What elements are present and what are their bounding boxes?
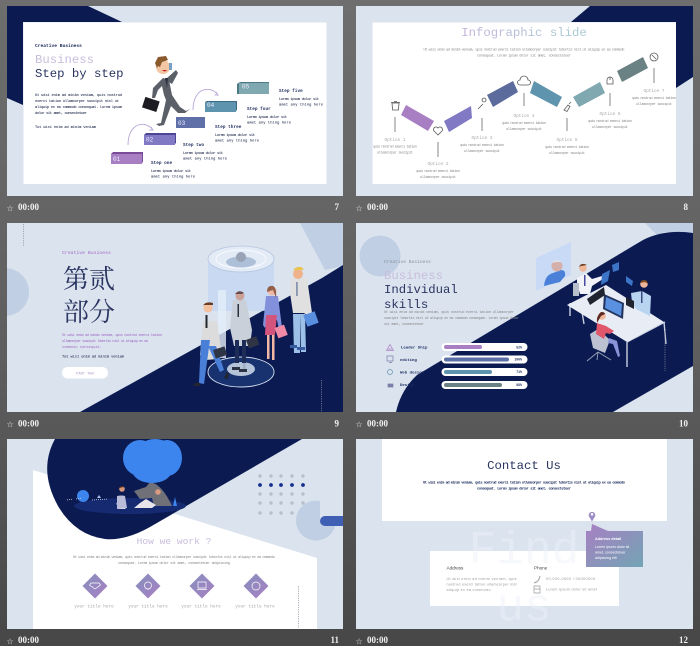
decorative slashes xyxy=(664,331,666,371)
footer bars with timings and slide numbers: 12 xyxy=(679,635,688,645)
footer bars with timings and slide numbers: ☆ xyxy=(356,204,363,213)
step descriptions: Lorem ipsum dolor sit xyxy=(279,97,319,102)
footer bars with timings and slide numbers: 00:00 xyxy=(18,418,39,428)
step descriptions: amet any thing here xyxy=(279,102,323,108)
lower white panel xyxy=(430,551,619,606)
option icons xyxy=(391,53,658,135)
step blocks 01 to 05: 03 xyxy=(178,120,186,127)
option descriptions: quis nostrud exerci tation xyxy=(545,145,589,150)
illustration: video window xyxy=(536,242,571,291)
decorative slashes xyxy=(24,224,322,411)
circle accent xyxy=(360,236,400,276)
left half circle xyxy=(7,268,29,316)
intro text: Ut wisi enim ad minim veniam, quis nostrud exerci tation ullamcorper suscipit lobortis nisl ut aliquip ex ea commodo xyxy=(424,48,624,52)
floating holograms xyxy=(601,262,633,286)
footer bars with timings and slide numbers: 00:00 xyxy=(367,635,388,645)
footer bars with timings and slide numbers: 10 xyxy=(679,418,688,428)
address callout: amet, consectetuer xyxy=(595,550,626,554)
skill percentages: 52% xyxy=(516,346,522,350)
diamond icons xyxy=(82,574,268,598)
intro text xyxy=(424,48,624,58)
phone column xyxy=(534,566,597,593)
option labels: Option 2 xyxy=(427,162,449,167)
illustration: businessman climbing steps xyxy=(142,56,190,126)
option descriptions: ullamcorper suscipit xyxy=(592,125,628,130)
heading: business step by step xyxy=(35,53,124,81)
address callout: Lorem ipsum dolor sit xyxy=(595,545,629,549)
chinese title: 第贰 xyxy=(63,265,115,294)
footer bars with timings and slide numbers: 8 xyxy=(684,202,688,212)
step labels: Step two xyxy=(183,143,204,148)
footer bars with timings and slide numbers xyxy=(6,202,688,646)
body text xyxy=(35,93,123,130)
address callout xyxy=(586,524,643,567)
option descriptions: quis nostrud exerci tation xyxy=(632,96,676,101)
body text xyxy=(73,556,275,565)
illustration: glass cylinder lab xyxy=(208,246,274,387)
white angled panel xyxy=(33,470,317,629)
footer bars with timings and slide numbers: 7 xyxy=(334,202,340,212)
white content panel xyxy=(372,22,676,184)
footer bars with timings and slide numbers: ☆ xyxy=(356,637,363,646)
option descriptions: ullamcorper suscipit xyxy=(549,151,585,156)
person: blond man in lab coat xyxy=(290,267,319,353)
body text: consequat. Lorem ipsum dolor sit amet, consectetuer adipiscing xyxy=(118,561,230,566)
option labels: Option 7 xyxy=(643,89,665,94)
chinese title: 部分 xyxy=(63,298,115,327)
step labels: Step four xyxy=(247,107,271,112)
footer bars with timings and slide numbers: 11 xyxy=(330,635,339,645)
skill bars xyxy=(442,343,528,389)
intro text: consequat. Lorem ipsum dolor sit amet, consectetuer xyxy=(477,54,571,58)
heading: Business xyxy=(384,269,443,283)
address column: Ut wisi enim ad minim veniam, quis xyxy=(446,577,517,581)
person: woman in pink skirt xyxy=(263,286,288,360)
option labels: Option 4 xyxy=(513,114,535,119)
step blocks 01 to 05: 01 xyxy=(113,156,121,163)
step descriptions: Lorem ipsum dolor sit xyxy=(183,151,223,156)
top white panel xyxy=(382,439,667,521)
curved arrows between steps xyxy=(128,89,218,145)
diamond captions xyxy=(74,604,274,608)
diamond captions: your title here xyxy=(128,604,168,610)
navy corner shape xyxy=(571,6,693,88)
body text: aliquip ex ea commodo consequat. Lorem ipsum xyxy=(35,105,123,110)
circle accent with blue pill xyxy=(296,501,343,541)
step descriptions: amet any thing here xyxy=(151,174,195,180)
skill labels: Design xyxy=(400,383,415,388)
footer bars with timings and slide numbers: ☆ xyxy=(6,204,14,213)
step blocks 01 to 05: 04 xyxy=(207,102,215,109)
step labels xyxy=(151,89,303,166)
option descriptions: quis nostrud exerci tation xyxy=(416,169,460,174)
big watermark: find us xyxy=(469,525,579,634)
body text: suscipit lobortis nisl ut aliquip ex ea commodo consequat. Lorem ipsum dolor xyxy=(384,316,519,321)
option descriptions: ullamcorper suscipit xyxy=(506,127,542,132)
footer bars with timings and slide numbers: ☆ xyxy=(356,420,363,429)
footer bars with timings and slide numbers: 9 xyxy=(334,418,340,428)
light blue corner xyxy=(645,223,693,235)
diamond captions: your title here xyxy=(235,604,275,610)
option descriptions xyxy=(373,96,676,180)
eyebrow: Creative Business xyxy=(384,259,431,265)
slide 12: contact us xyxy=(356,439,693,634)
option descriptions: quis nostrud exerci tation xyxy=(373,144,417,150)
purple body text xyxy=(62,333,162,350)
footer bars with timings and slide numbers: 00:00 xyxy=(18,202,39,212)
footer bars with timings and slide numbers: ☆ xyxy=(6,420,14,429)
slide 8: infographic zigzag xyxy=(356,6,693,196)
purple body text: Ut wisi enim ad minim veniam, quis nostrud exerci tation xyxy=(62,333,162,338)
button: part two xyxy=(62,367,108,378)
step descriptions: Lorem ipsum dolor sit xyxy=(215,133,255,138)
white content panel xyxy=(24,22,326,184)
address column: nostrud exerci tation ullamcorper nisl xyxy=(446,582,517,586)
step descriptions xyxy=(151,97,323,180)
option descriptions: quis nostrud exerci tation xyxy=(502,121,546,126)
big watermark: find us: Find xyxy=(469,525,579,577)
slide 11: how we work xyxy=(7,439,343,629)
skill percentages: 71% xyxy=(516,370,522,374)
option descriptions: ullamcorper suscipit xyxy=(377,150,413,156)
option descriptions: ullamcorper suscipit xyxy=(420,175,456,180)
body text: exerci tation ullamcorper suscipit nisl ut xyxy=(35,99,119,104)
phone column: 00,000-0000 / 00000000 xyxy=(546,577,595,581)
step descriptions: amet any thing here xyxy=(183,156,227,162)
skill icons xyxy=(386,344,394,387)
step descriptions: Lorem ipsum dolor sit xyxy=(151,169,191,174)
footer bars with timings and slide numbers: 00:00 xyxy=(18,635,39,645)
button: part two: PART TWO xyxy=(76,372,95,376)
footer bars with timings and slide numbers: 00:00 xyxy=(367,202,388,212)
address column: Address xyxy=(446,566,464,570)
monitors xyxy=(587,287,634,319)
body text: consequat. Lorem ipsum dolor sit amet, consectetuer xyxy=(477,486,571,492)
slide 9: part two section cover xyxy=(0,223,343,412)
slide 7: business step by step xyxy=(7,6,343,196)
skill labels: editing xyxy=(400,358,417,363)
step descriptions: Lorem ipsum dolor sit xyxy=(247,115,287,120)
footer bars with timings and slide numbers: 00:00 xyxy=(367,418,388,428)
body text: dolor sit amet, consectetuer xyxy=(35,111,87,116)
phone column: Phone xyxy=(534,566,548,570)
heading: skills xyxy=(384,298,428,312)
step blocks 01 to 05: 02 xyxy=(146,136,154,144)
navy blob xyxy=(47,439,302,539)
option descriptions: quis nostrud exerci tation xyxy=(588,119,632,124)
step labels: Step five xyxy=(279,89,303,94)
man standing at back left xyxy=(573,264,603,296)
skill labels: Web design xyxy=(400,370,425,376)
step labels: Step three xyxy=(215,125,242,130)
step labels: Step one xyxy=(151,161,172,166)
phone column: Lorem ipsum dolor sit amet xyxy=(546,588,597,592)
dot grid xyxy=(258,474,305,515)
body text: Ut wisi enim ad minim veniam, quis nostrud xyxy=(35,93,122,98)
address column xyxy=(446,566,517,592)
illustration: people under tree xyxy=(67,439,186,514)
footer bars with timings and slide numbers: ☆ xyxy=(6,637,14,646)
navy corner shape xyxy=(7,6,122,105)
skill labels xyxy=(400,346,428,388)
heading: Contact Us xyxy=(487,459,561,473)
address callout: Address detail xyxy=(595,537,621,541)
heading: business step by step: Step by step xyxy=(35,67,124,81)
person: man with blue trousers xyxy=(193,302,229,386)
light blue corner xyxy=(300,223,343,270)
secondary note: Tut wisi enim ad minim veniam xyxy=(62,354,125,360)
eyebrow: Creative Business xyxy=(62,250,111,256)
option descriptions: ullamcorper suscipit xyxy=(464,149,500,154)
step blocks 01 to 05: 05 xyxy=(242,84,250,90)
heading: business step by step: Business xyxy=(35,53,94,67)
eyebrow: creative business: Creative Business xyxy=(35,43,82,49)
slide 10: individual skills xyxy=(356,223,693,412)
woman seated front xyxy=(587,312,620,361)
illustration: team at desk xyxy=(567,262,666,367)
skill percentages: 88% xyxy=(516,383,522,387)
purple body text: ullamcorper suscipit lobortis nisl ut aliquip ex ea xyxy=(62,339,149,344)
step blocks 01 to 05 xyxy=(111,82,269,164)
body text xyxy=(423,480,626,492)
step descriptions: amet any thing here xyxy=(215,138,259,144)
body text xyxy=(384,310,519,327)
leader lines xyxy=(395,68,654,157)
purple body text: commodo consequat. xyxy=(62,345,102,350)
body text: Tut wisi enim ad minim veniam xyxy=(35,125,97,130)
skill percentages: 100% xyxy=(514,358,522,362)
body text: Ut wisi enim ad minim veniam, quis nostrud exerci tation ullamcorper suscipit lobortis nisl ut aliquip ex ea commodo xyxy=(423,480,626,486)
navy rounded band xyxy=(396,232,693,412)
heading: How we work ? xyxy=(137,536,212,547)
option labels: Option 6 xyxy=(599,112,621,117)
option labels: Option 5 xyxy=(556,138,578,143)
map pin xyxy=(589,512,595,522)
skill percentages xyxy=(514,346,522,387)
skill labels: Leader Ship xyxy=(401,346,428,350)
decorative slashes xyxy=(298,586,299,628)
person: woman in lab coat xyxy=(230,291,259,372)
address column: aliquip ex ea commodo xyxy=(446,588,490,592)
body text: sit amet, consectetuer xyxy=(384,322,424,327)
diamond captions: your title here xyxy=(181,604,221,610)
option descriptions: quis nostrud exerci tation xyxy=(460,143,504,148)
option labels: Option 3 xyxy=(471,136,493,141)
heading xyxy=(384,269,458,312)
body text: Ut wisi enim ad minim veniam, quis nostrud exerci tation ullamcorper suscipit lobortis nisl ut aliquip ex ea commodo xyxy=(73,555,275,560)
man seated right xyxy=(631,280,651,316)
address callout: adipiscing elit xyxy=(595,556,617,560)
big watermark: find us: us xyxy=(496,582,552,634)
diamond captions: your title here xyxy=(74,604,114,610)
zigzag ribbon segments xyxy=(401,57,648,132)
option descriptions: ullamcorper suscipit xyxy=(636,102,672,107)
option labels xyxy=(384,89,665,167)
heading: Individual xyxy=(384,283,458,297)
option labels: Option 1 xyxy=(384,138,406,143)
step descriptions: amet any thing here xyxy=(247,120,291,126)
chinese title xyxy=(63,265,115,327)
navy diagonal xyxy=(80,265,343,412)
title: Infographic slide xyxy=(461,26,587,40)
body text: Ut wisi enim ad minim veniam, quis nostrud exerci tation ullamcorper xyxy=(384,310,514,315)
